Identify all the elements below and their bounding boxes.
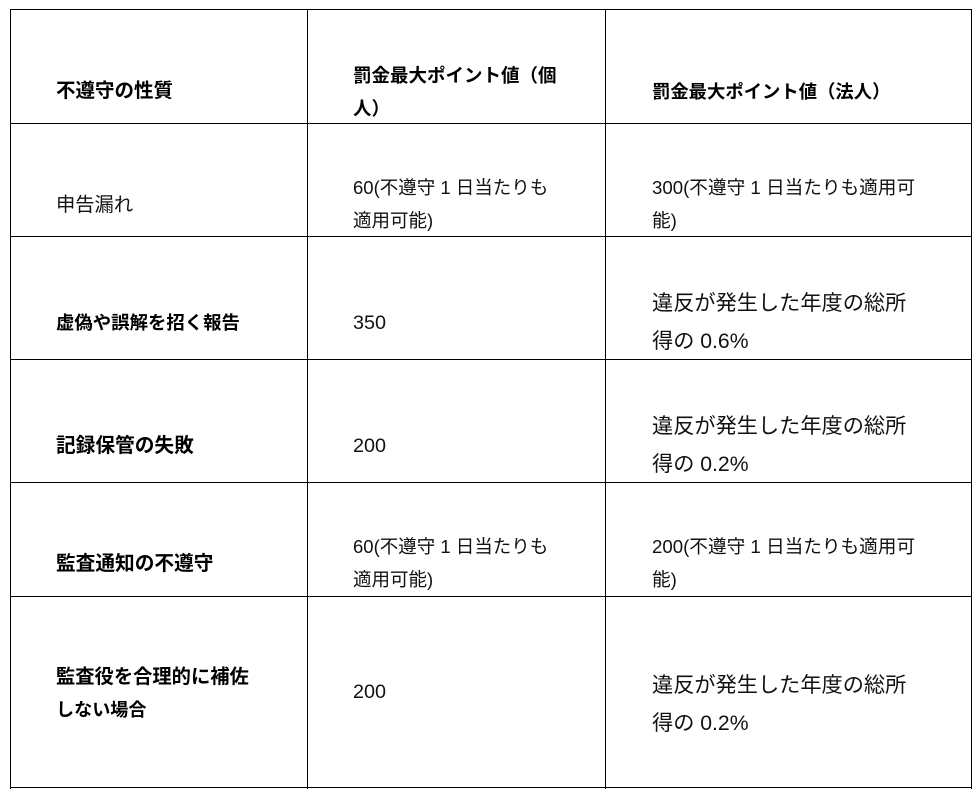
row 1 corporate value: 300(不遵守 1 日当たりも適用可 — [652, 177, 915, 198]
row 2 corporate value: 得の 0.6% — [652, 330, 749, 353]
row 1 corporate value: 能) — [652, 210, 677, 231]
row 4 corporate value — [652, 536, 915, 590]
row 1 individual value: 適用可能) — [353, 210, 433, 231]
row 2 individual value: 350 — [353, 312, 386, 334]
column heading: maximum penalty points (individual): 罰金最大ポイント値（個 — [353, 65, 557, 86]
row 5 label: failure to reasonably assist auditor: しない場合 — [56, 700, 146, 720]
row 1 individual value — [353, 177, 548, 231]
row 5 label: failure to reasonably assist auditor — [56, 666, 249, 720]
row 4 individual value: 60(不遵守 1 日当たりも — [353, 536, 548, 557]
row 5 label: failure to reasonably assist auditor: 監査役を合理的に補佐 — [56, 667, 249, 688]
row 4 corporate value: 能) — [652, 569, 677, 590]
row 3 corporate value: 違反が発生した年度の総所 — [652, 415, 906, 438]
row 2 label: false or misleading report: 虚偽や誤解を招く報告 — [56, 312, 240, 333]
row 5 corporate value — [652, 674, 906, 735]
row 3 corporate value — [652, 415, 906, 476]
row 4 label: non-compliance with audit notice: 監査通知の不遵守 — [56, 553, 214, 575]
row 5 individual value: 200 — [353, 681, 386, 703]
row 3 corporate value: 得の 0.2% — [652, 453, 749, 476]
column heading: maximum penalty points (individual) — [353, 65, 557, 119]
row 3 label: failure to keep records: 記録保管の失敗 — [56, 435, 194, 457]
row 3 individual value: 200 — [353, 435, 386, 457]
row 4 corporate value: 200(不遵守 1 日当たりも適用可 — [652, 536, 915, 557]
column heading: maximum penalty points (corporate): 罰金最大ポイント値（法人） — [652, 81, 890, 102]
row 1 individual value: 60(不遵守 1 日当たりも — [353, 177, 548, 198]
row 4 individual value: 適用可能) — [353, 569, 433, 590]
row 4 individual value — [353, 536, 548, 590]
row 2 corporate value: 違反が発生した年度の総所 — [652, 292, 906, 315]
row 5 corporate value: 得の 0.2% — [652, 712, 749, 735]
column heading: maximum penalty points (individual): 人） — [353, 98, 390, 119]
row 1 label: failure to file: 申告漏れ — [56, 195, 133, 216]
row 1 corporate value — [652, 177, 915, 231]
row 5 corporate value: 違反が発生した年度の総所 — [652, 674, 906, 697]
column heading: nature of non-compliance: 不遵守の性質 — [56, 80, 173, 102]
row 2 corporate value — [652, 292, 906, 353]
